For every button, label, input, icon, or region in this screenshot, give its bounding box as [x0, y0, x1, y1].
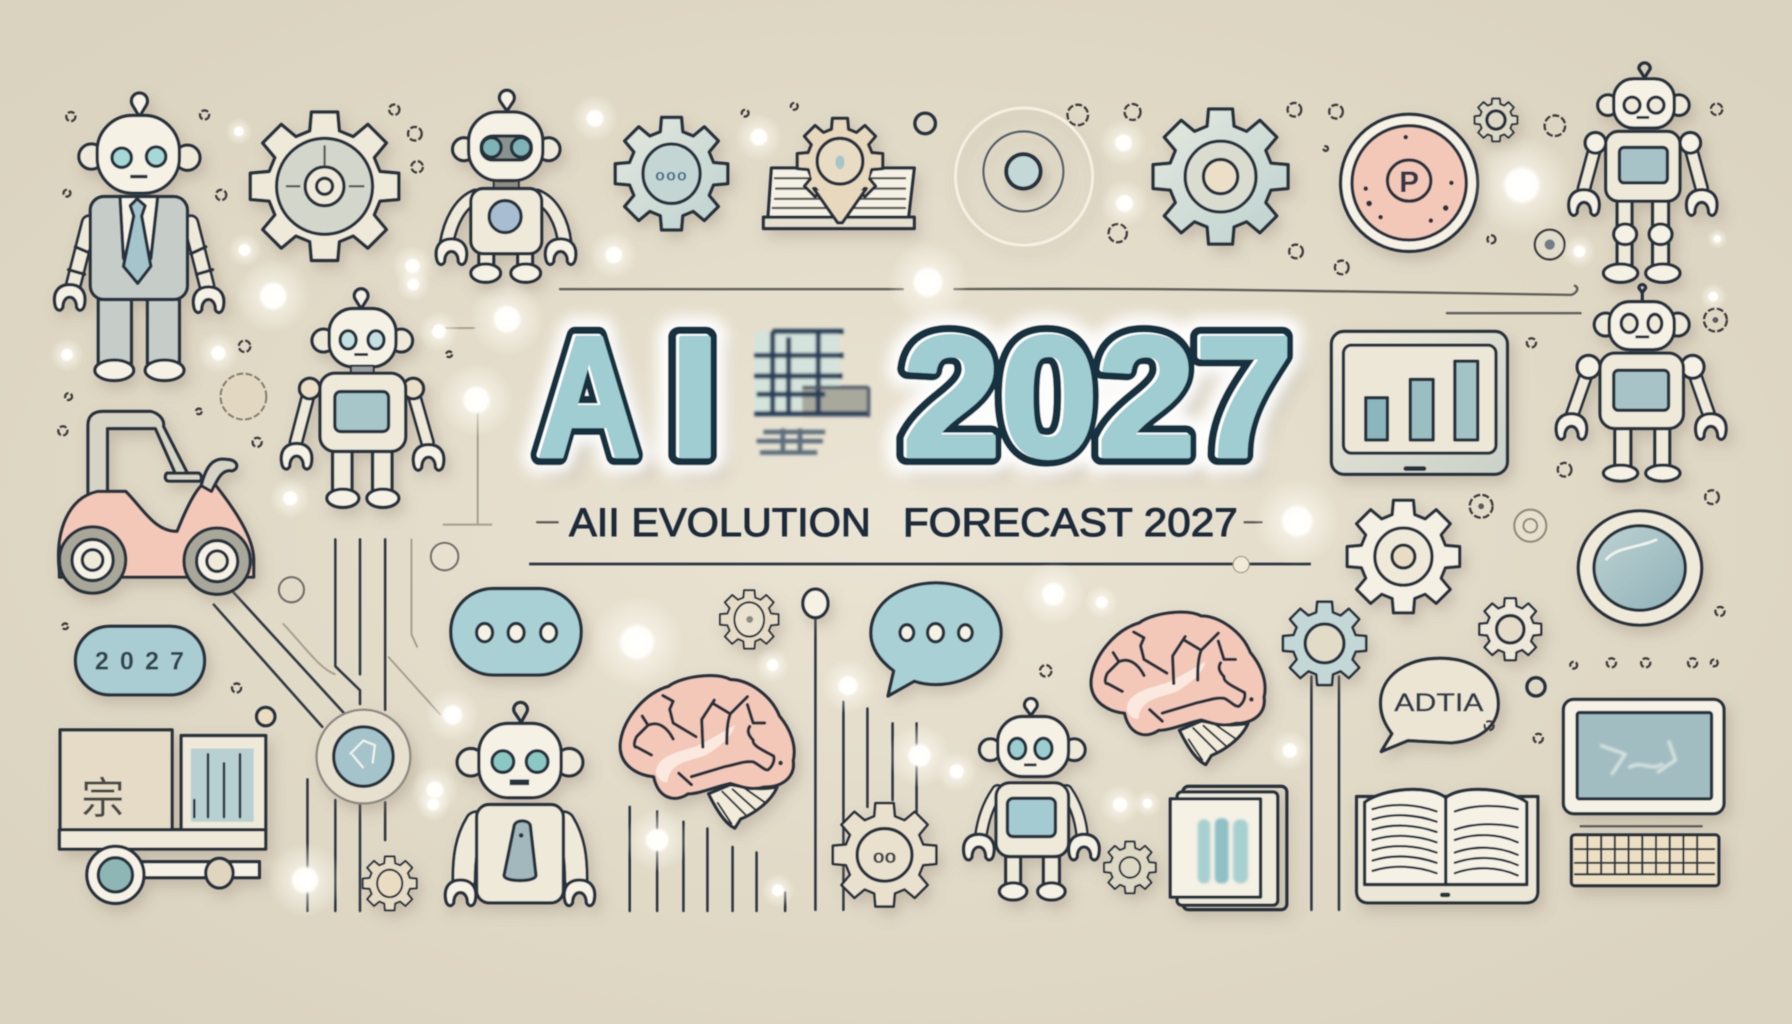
title: [535, 301, 1293, 493]
screen: [1007, 798, 1055, 837]
arms: [1556, 355, 1726, 439]
large gear bottom center: [833, 803, 936, 907]
neck: [351, 366, 374, 374]
year pill: 2027: [95, 648, 184, 676]
head: [998, 717, 1069, 777]
body: [1606, 131, 1680, 201]
divider with slider: [529, 557, 1311, 573]
open book: [1357, 789, 1538, 903]
cargo marks: 宗: [81, 776, 125, 824]
tablet bar chart: [1331, 331, 1507, 474]
dots: [477, 623, 557, 642]
antenna: [131, 93, 147, 117]
title year: 2027: [901, 301, 1290, 492]
dots: [900, 624, 972, 642]
title year: 2027: [903, 302, 1293, 493]
speech bubble ADTIA: [1381, 658, 1498, 752]
neck: [494, 178, 519, 190]
chest panel: [504, 821, 536, 881]
subtitle: [569, 501, 1238, 545]
gear with face: ooo: [655, 168, 688, 185]
robot center left: [281, 289, 444, 507]
truck with chart: [59, 730, 266, 903]
speech bubble ADTIA: ADTIA: [1394, 689, 1484, 717]
scooter: [59, 411, 254, 594]
pin circle: [803, 589, 828, 618]
legs: [1603, 429, 1680, 481]
title letter I: I: [667, 301, 718, 492]
glitched title glyph: [754, 331, 870, 455]
legs and feet: [95, 299, 184, 381]
small white gear: [1479, 598, 1541, 660]
page text lines: [1373, 805, 1518, 875]
axle: [142, 862, 259, 878]
chart box: [181, 736, 266, 830]
title glow: I: [667, 301, 718, 492]
gear with face: [615, 117, 728, 230]
robot top right: [1569, 63, 1717, 282]
legs and feet: [471, 249, 541, 282]
lens: [1578, 511, 1702, 625]
title letter I: I: [667, 301, 718, 492]
subtitle: FORECAST 2027: [903, 501, 1238, 545]
antenna: [1025, 699, 1037, 715]
cover bars: [1198, 818, 1248, 883]
pages: [1365, 789, 1527, 885]
title glow: 2027: [901, 301, 1290, 492]
ears: [457, 749, 583, 776]
subtitle dashes: [537, 521, 1262, 523]
head: [329, 309, 396, 367]
arms: [54, 223, 224, 312]
title shadow: [546, 313, 1301, 504]
seat and handle: [165, 459, 237, 491]
title shadow: A: [546, 313, 649, 504]
small gear bottom center: [720, 590, 778, 649]
book stack: [1170, 786, 1287, 910]
small gear top right: [1475, 99, 1517, 141]
scattered rings: [58, 103, 1727, 743]
monitor: [1563, 699, 1724, 814]
glowing lights: [50, 94, 1728, 918]
head: [469, 112, 543, 181]
bars: [1366, 361, 1478, 440]
robot in suit: [54, 93, 224, 381]
suit body: [90, 197, 187, 299]
truck base: [59, 830, 266, 849]
legs: [999, 857, 1065, 900]
screen: [1614, 370, 1669, 410]
face: [492, 751, 548, 785]
ears: [979, 739, 1085, 761]
head: [1614, 79, 1674, 128]
ears and head: [79, 115, 200, 193]
screen: [335, 392, 389, 432]
connector lines: [214, 286, 1581, 911]
body: [59, 480, 254, 577]
arms: [445, 823, 595, 906]
artwork: [50, 63, 1728, 918]
body: [996, 783, 1069, 857]
ears: [312, 329, 413, 352]
robot with visor: [436, 90, 576, 282]
gear target: [250, 112, 399, 261]
ears: [1594, 313, 1689, 336]
body: [320, 373, 406, 451]
body: [1600, 353, 1683, 429]
small gear near hub: [363, 856, 417, 910]
gear right of title top: [1153, 109, 1288, 244]
small gear near book stack: [1104, 842, 1156, 893]
title shadow: I: [677, 313, 729, 504]
arms: [281, 378, 444, 470]
title letter A: A: [538, 302, 641, 493]
title glow: [535, 301, 1290, 492]
title shadow: 2027: [911, 313, 1301, 504]
face: [340, 331, 384, 356]
ears: [1598, 95, 1689, 115]
front wheel: [87, 846, 144, 903]
face: [1621, 314, 1662, 338]
head: [479, 723, 561, 798]
chat bubble with dots: [451, 589, 581, 675]
pink coin: P: [1399, 166, 1419, 199]
white gear: [1347, 500, 1460, 613]
face: [112, 147, 166, 178]
robot middle right: [1556, 285, 1726, 481]
antenna: [499, 90, 514, 111]
rear hub: [206, 858, 233, 888]
brain right: [1091, 612, 1265, 765]
title letter I: I: [669, 302, 721, 493]
target orbit: [955, 108, 1093, 245]
canopy: [88, 411, 191, 514]
large gear bottom center: oo: [873, 846, 897, 868]
visor: [481, 136, 531, 160]
antenna: [354, 289, 368, 309]
robot bottom center: [964, 699, 1099, 900]
robot bottom left: [445, 702, 595, 906]
blue gear: [1283, 602, 1366, 685]
antenna: [1639, 63, 1650, 78]
chest light: [489, 201, 521, 233]
arms: [1569, 133, 1717, 215]
face: [1009, 738, 1052, 766]
legs: [327, 451, 399, 507]
cargo box: [60, 730, 172, 831]
arms: [964, 791, 1099, 860]
legs: [1603, 201, 1680, 282]
head: [1609, 302, 1674, 350]
arms: [436, 197, 576, 264]
body: [477, 805, 563, 903]
body: [471, 189, 542, 254]
brain left: [620, 676, 794, 828]
hub circle: [317, 710, 410, 803]
ears: [453, 138, 560, 161]
pink coin: [1341, 114, 1478, 251]
speech bubble blue: [871, 583, 1001, 696]
antenna: [514, 702, 527, 722]
year pill: [75, 626, 205, 695]
title year: 2027: [901, 301, 1290, 492]
screen: [1619, 147, 1667, 183]
title glow: A: [535, 301, 638, 492]
book with gear: [763, 118, 914, 229]
tie: [123, 199, 151, 283]
wheels: [59, 527, 250, 594]
title letter A: A: [535, 301, 638, 492]
antenna: [1639, 285, 1646, 302]
shirt: [120, 197, 158, 279]
title letter A: A: [535, 301, 638, 492]
keyboard: [1571, 826, 1719, 886]
face: [1624, 97, 1664, 119]
subtitle: AII EVOLUTION: [569, 501, 871, 545]
